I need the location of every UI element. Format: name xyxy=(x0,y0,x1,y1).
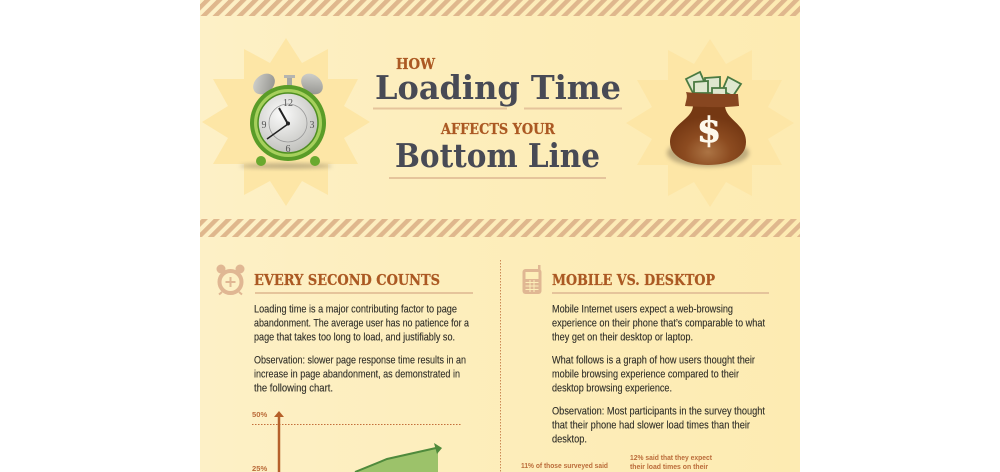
callout: 12 percent xyxy=(630,453,712,471)
paragraph one xyxy=(552,304,765,344)
observation paragraph: the following chart. xyxy=(254,382,333,394)
icon: alarm clock with starburst: 9 xyxy=(262,120,266,131)
title line: Bottom Line: Bottom Line xyxy=(395,136,600,175)
icon: mobile phone xyxy=(522,265,542,294)
observation paragraph: Observation: Most participants in the survey thought xyxy=(552,406,765,418)
title line: Loading Time: Loading Time xyxy=(375,68,621,107)
observation paragraph xyxy=(552,406,765,446)
paragraph two xyxy=(552,354,755,394)
area chart xyxy=(252,410,462,472)
paragraph one: they get on their desktop or laptop. xyxy=(552,332,693,344)
intro paragraph: abandonment. The average user has no patience for a xyxy=(254,318,470,330)
callout: 12 percent: 12% said that they expect xyxy=(630,453,712,462)
intro paragraph xyxy=(254,304,470,344)
title line: How: HOW xyxy=(396,56,436,73)
paragraph one: Mobile Internet users expect a web-browsing xyxy=(552,304,733,316)
paragraph one: experience on their phone that’s comparable to what xyxy=(552,318,765,330)
title xyxy=(373,56,622,179)
heading: EVERY SECOND COUNTS xyxy=(254,272,440,289)
icon: alarm clock with starburst: 6 xyxy=(286,144,290,155)
icon: alarm clock with starburst: 3 xyxy=(310,120,314,131)
heading: MOBILE VS. DESKTOP xyxy=(552,272,715,289)
callout: 12 percent: their load times on their xyxy=(630,462,708,471)
paragraph two: What follows is a graph of how users thought their xyxy=(552,354,755,366)
icon: money bag with starburst xyxy=(626,39,794,207)
page background xyxy=(200,0,800,472)
panel: every second counts xyxy=(216,264,473,472)
observation paragraph: desktop. xyxy=(552,434,587,446)
panel: mobile vs desktop xyxy=(521,265,769,471)
observation paragraph: increase in page abandonment, as demonstrated in xyxy=(254,368,460,380)
intro paragraph: page that takes too long to load, and justifiably so. xyxy=(254,332,455,344)
observation paragraph xyxy=(254,354,466,394)
icon: money bag with starburst: $ xyxy=(697,110,721,151)
title line: Affects Your: AFFECTS YOUR xyxy=(440,121,556,138)
callout: 11 percent: 11% of those surveyed said xyxy=(521,461,608,470)
paragraph two: mobile browsing experience compared to their xyxy=(552,368,739,380)
axis label: 50%: 50% xyxy=(252,410,267,419)
top striped band xyxy=(200,0,800,16)
icon: alarm clock outline xyxy=(216,264,244,294)
paragraph two: desktop browsing experience. xyxy=(552,382,672,394)
intro paragraph: Loading time is a major contributing factor to page xyxy=(254,304,457,316)
icon: alarm clock with starburst: 12 xyxy=(283,98,293,109)
middle striped band xyxy=(200,219,800,237)
observation paragraph: that their phone had slower load times than their xyxy=(552,420,750,432)
icon: alarm clock with starburst xyxy=(202,38,370,206)
observation paragraph: Observation: slower page response time results in an xyxy=(254,354,466,366)
